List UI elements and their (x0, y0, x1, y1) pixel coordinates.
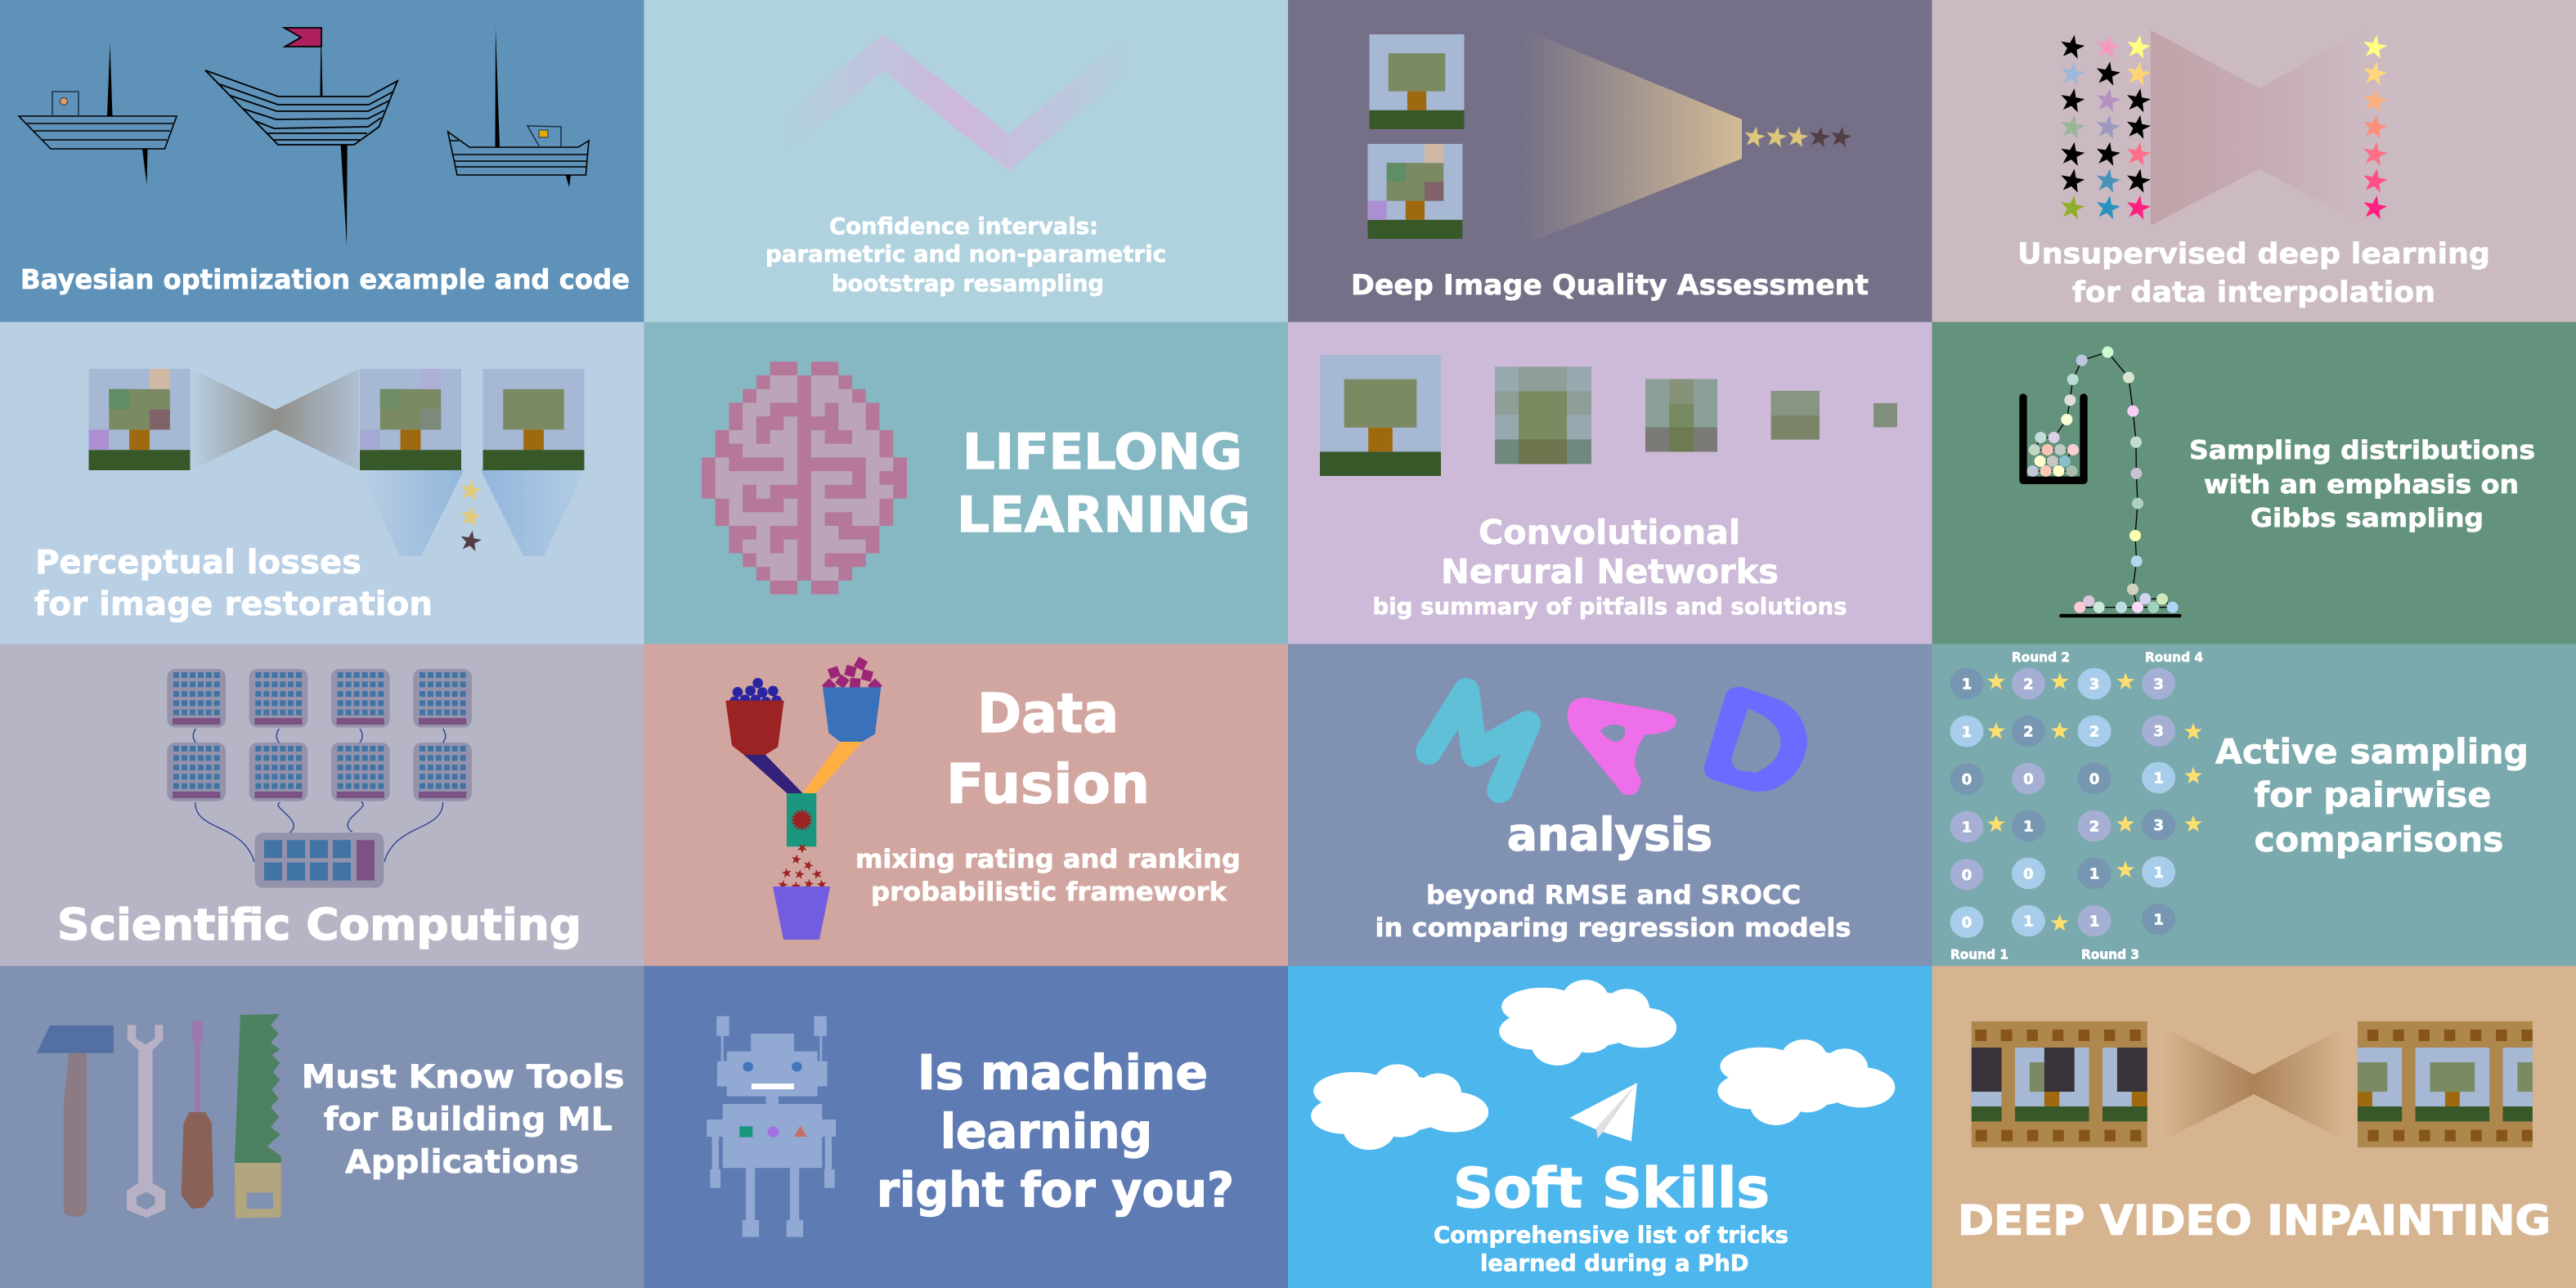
text: Confidence intervals: bootstrap resampling (832, 270, 1104, 297)
image: downsampled tree level 1 (1495, 366, 1591, 464)
subtitle: Data Fusion: mixing rating and ranking (855, 845, 1241, 874)
chart: tournament rounds: 2 (2089, 818, 2099, 836)
image: full-resolution tree (1320, 355, 1441, 476)
labels: round names: Round 4 (2145, 649, 2203, 665)
heading: Perceptual losses (34, 544, 433, 623)
chart: tournament rounds (1950, 668, 2175, 938)
chart: tournament rounds: 3 (2153, 723, 2164, 740)
labels: round names: Round 2 (2012, 649, 2070, 665)
heading: tools (302, 1059, 625, 1181)
subtitle: MAD: in comparing regression models (1376, 913, 1851, 943)
heading: Sampling distributions: Sampling distributions (2189, 436, 2535, 465)
chart: tournament rounds: 0 (1962, 867, 1972, 884)
chart: tournament rounds: 1 (2023, 913, 2034, 931)
heading: Lifelong learning (957, 424, 1250, 544)
icon: clouds (1311, 980, 1895, 1150)
icon: compute cluster (167, 669, 472, 888)
icon: screwdriver (182, 1021, 213, 1209)
icon: bead chain and cup (2023, 347, 2179, 616)
image: clean target tree (482, 369, 584, 470)
chart: tournament rounds: 0 (2023, 770, 2034, 788)
panel: Perceptual losses (0, 322, 644, 644)
icon: letter D (1704, 687, 1807, 792)
chart: zigzag confidence band (781, 51, 1133, 152)
heading: Soft Skills: Soft Skills (1453, 1156, 1770, 1220)
chart: tournament rounds: 3 (2153, 817, 2164, 834)
panel: Lifelong learning (644, 322, 1289, 644)
chart: tournament rounds: 2 (2023, 675, 2034, 693)
heading: Convolutional networks: Nerural Networks (1441, 552, 1779, 591)
heading: Active sampling: comparisons (2254, 819, 2504, 859)
icon: interpolated star column (2361, 33, 2389, 220)
heading: Lifelong learning: LEARNING (957, 487, 1250, 544)
image: downsampled tree level 3 (1771, 391, 1820, 440)
panel: Confidence intervals (644, 0, 1289, 322)
chart: tournament rounds: 1 (2089, 865, 2099, 883)
heading: machine learning question: learning (940, 1104, 1152, 1160)
chart: tournament rounds: 0 (1962, 771, 1972, 788)
heading: Bayesian: Bayesian optimization example and code (20, 263, 630, 295)
panel: MAD analysis (1288, 644, 1932, 967)
icon: star rating (1743, 124, 1853, 148)
icon: small boat with cabin (19, 43, 177, 185)
heading: Sampling distributions (2189, 436, 2535, 533)
panel: Data Fusion (644, 644, 1289, 967)
chart: tournament rounds: 0 (2089, 770, 2099, 788)
labels: round names (1950, 649, 2203, 963)
icon: perceptual cones (360, 470, 585, 556)
chart: tournament rounds: 1 (2023, 818, 2034, 836)
subtitle: CNN: big summary of pitfalls and solutions (1372, 593, 1847, 620)
heading: machine learning question: right for you? (877, 1162, 1234, 1218)
icon: fusion funnel (725, 657, 882, 940)
heading: tools: Applications (345, 1144, 579, 1181)
heading: Convolutional networks: Convolutional (1479, 513, 1740, 552)
icon: hammer (37, 1025, 114, 1217)
heading: Scientific Computing: Scientific Computing (57, 900, 581, 950)
icon: paper plane (1570, 1083, 1637, 1142)
text: Confidence intervals (765, 213, 1166, 297)
chart: tournament rounds: 1 (2089, 913, 2099, 931)
image: reference tree (1369, 34, 1464, 129)
heading: machine learning question: Is machine (918, 1045, 1208, 1101)
chart: tournament rounds: 3 (2153, 675, 2164, 693)
panel: Deep Image Quality Assessment (1288, 0, 1932, 322)
panel: Must know tools (0, 966, 644, 1288)
text: Confidence intervals: Confidence intervals: (829, 213, 1098, 240)
icon: restoration network (191, 369, 359, 470)
subtitle: Data Fusion (855, 845, 1241, 907)
heading: Convolutional networks (1441, 513, 1779, 591)
chart: tournament rounds: 1 (2153, 770, 2164, 787)
chart: tournament rounds: 1 (2153, 911, 2164, 929)
subtitle: Soft Skills (1434, 1222, 1788, 1277)
image: distorted tree (1367, 144, 1462, 239)
labels: round names: Round 1 (1950, 947, 2008, 963)
icon: inpainting network (2164, 1028, 2344, 1140)
icon: saw (235, 1014, 281, 1218)
icon: star grid with missing data (2058, 33, 2152, 220)
heading: Perceptual losses: for image restoration (34, 586, 433, 623)
heading: Data Fusion (946, 682, 1150, 816)
panel: Bayesian optimization (0, 0, 644, 322)
heading: Unsupervised: for data interpolation (2072, 276, 2435, 309)
heading: Lifelong learning: LIFELONG (963, 424, 1242, 481)
heading: IQA: Deep Image Quality Assessment (1351, 269, 1869, 302)
heading: Unsupervised: Unsupervised deep learning (2017, 238, 2490, 271)
heading: tools: for Building ML (324, 1102, 613, 1138)
chart: tournament rounds: 1 (2153, 864, 2164, 882)
heading: Data Fusion: Fusion (946, 752, 1150, 816)
icon: letter M (1429, 691, 1528, 790)
panel: Convolutional Neural Networks (1288, 322, 1932, 644)
heading: Deep Video Inpainting: DEEP VIDEO INPAINTING (1958, 1197, 2551, 1245)
chart: tournament rounds: 1 (1962, 724, 1972, 741)
panel: Is machine learning right for you (644, 966, 1289, 1288)
panel: Soft skills (1288, 966, 1932, 1288)
icon: autoencoder bow (2151, 29, 2364, 226)
panel: Active sampling (1932, 644, 2576, 967)
chart: tournament rounds: 2 (2023, 723, 2034, 741)
heading: Active sampling: Active sampling (2215, 731, 2529, 771)
image: restored tree (360, 369, 461, 470)
icon: pixel brain (702, 361, 907, 595)
text: Confidence intervals: parametric and non-parametric (765, 240, 1166, 267)
chart: tournament rounds: 0 (1962, 914, 1972, 931)
heading: Sampling distributions: with an emphasis on (2204, 470, 2519, 500)
subtitle: MAD (1376, 881, 1851, 943)
heading: Perceptual losses: Perceptual losses (35, 544, 361, 581)
labels: round names: Round 3 (2081, 947, 2139, 963)
chart: tournament rounds: 0 (2023, 865, 2034, 883)
icon: wrench (127, 1025, 165, 1218)
chart: tournament rounds: 1 (1962, 819, 1972, 836)
icon: quality stars (459, 478, 482, 552)
icon: letter A (1568, 698, 1676, 795)
heading: Active sampling: for pairwise (2254, 775, 2491, 815)
panel: Scientific computing (0, 644, 644, 967)
panel: Deep video inpainting (1932, 966, 2576, 1288)
icon: quality funnel (1522, 29, 1742, 245)
icon: robot (707, 1016, 836, 1237)
icon: corrupted film strip (1972, 1021, 2147, 1147)
icon: large boat with flag (205, 26, 397, 245)
panel: Unsupervised interpolation (1932, 0, 2576, 322)
image: downsampled tree level 4 (1874, 403, 1897, 427)
heading: analysis: analysis (1507, 808, 1712, 860)
heading: Active sampling (2215, 731, 2529, 859)
subtitle: Soft Skills: Comprehensive list of tricks (1434, 1222, 1788, 1248)
icon: restored film strip (2358, 1021, 2533, 1147)
chart: tournament rounds: 3 (2089, 675, 2099, 693)
heading: machine learning question (877, 1045, 1234, 1218)
heading: Data Fusion: Data (977, 682, 1119, 745)
subtitle: Data Fusion: probabilistic framework (871, 877, 1227, 907)
image: downsampled tree level 2 (1645, 379, 1717, 451)
icon: boat with tall mast (448, 27, 589, 187)
heading: tools: Must Know Tools (302, 1059, 625, 1096)
heading: Sampling distributions: Gibbs sampling (2251, 504, 2484, 533)
subtitle: MAD: beyond RMSE and SROCC (1426, 881, 1801, 910)
image: distorted input tree (88, 369, 190, 470)
heading: Unsupervised (2017, 238, 2490, 309)
panel: Gibbs sampling (1932, 322, 2576, 644)
chart: tournament rounds: 2 (2089, 723, 2099, 741)
subtitle: Soft Skills: learned during a PhD (1480, 1250, 1748, 1277)
chart: tournament rounds: 1 (1962, 675, 1972, 693)
icon: winner stars (1987, 672, 2202, 931)
